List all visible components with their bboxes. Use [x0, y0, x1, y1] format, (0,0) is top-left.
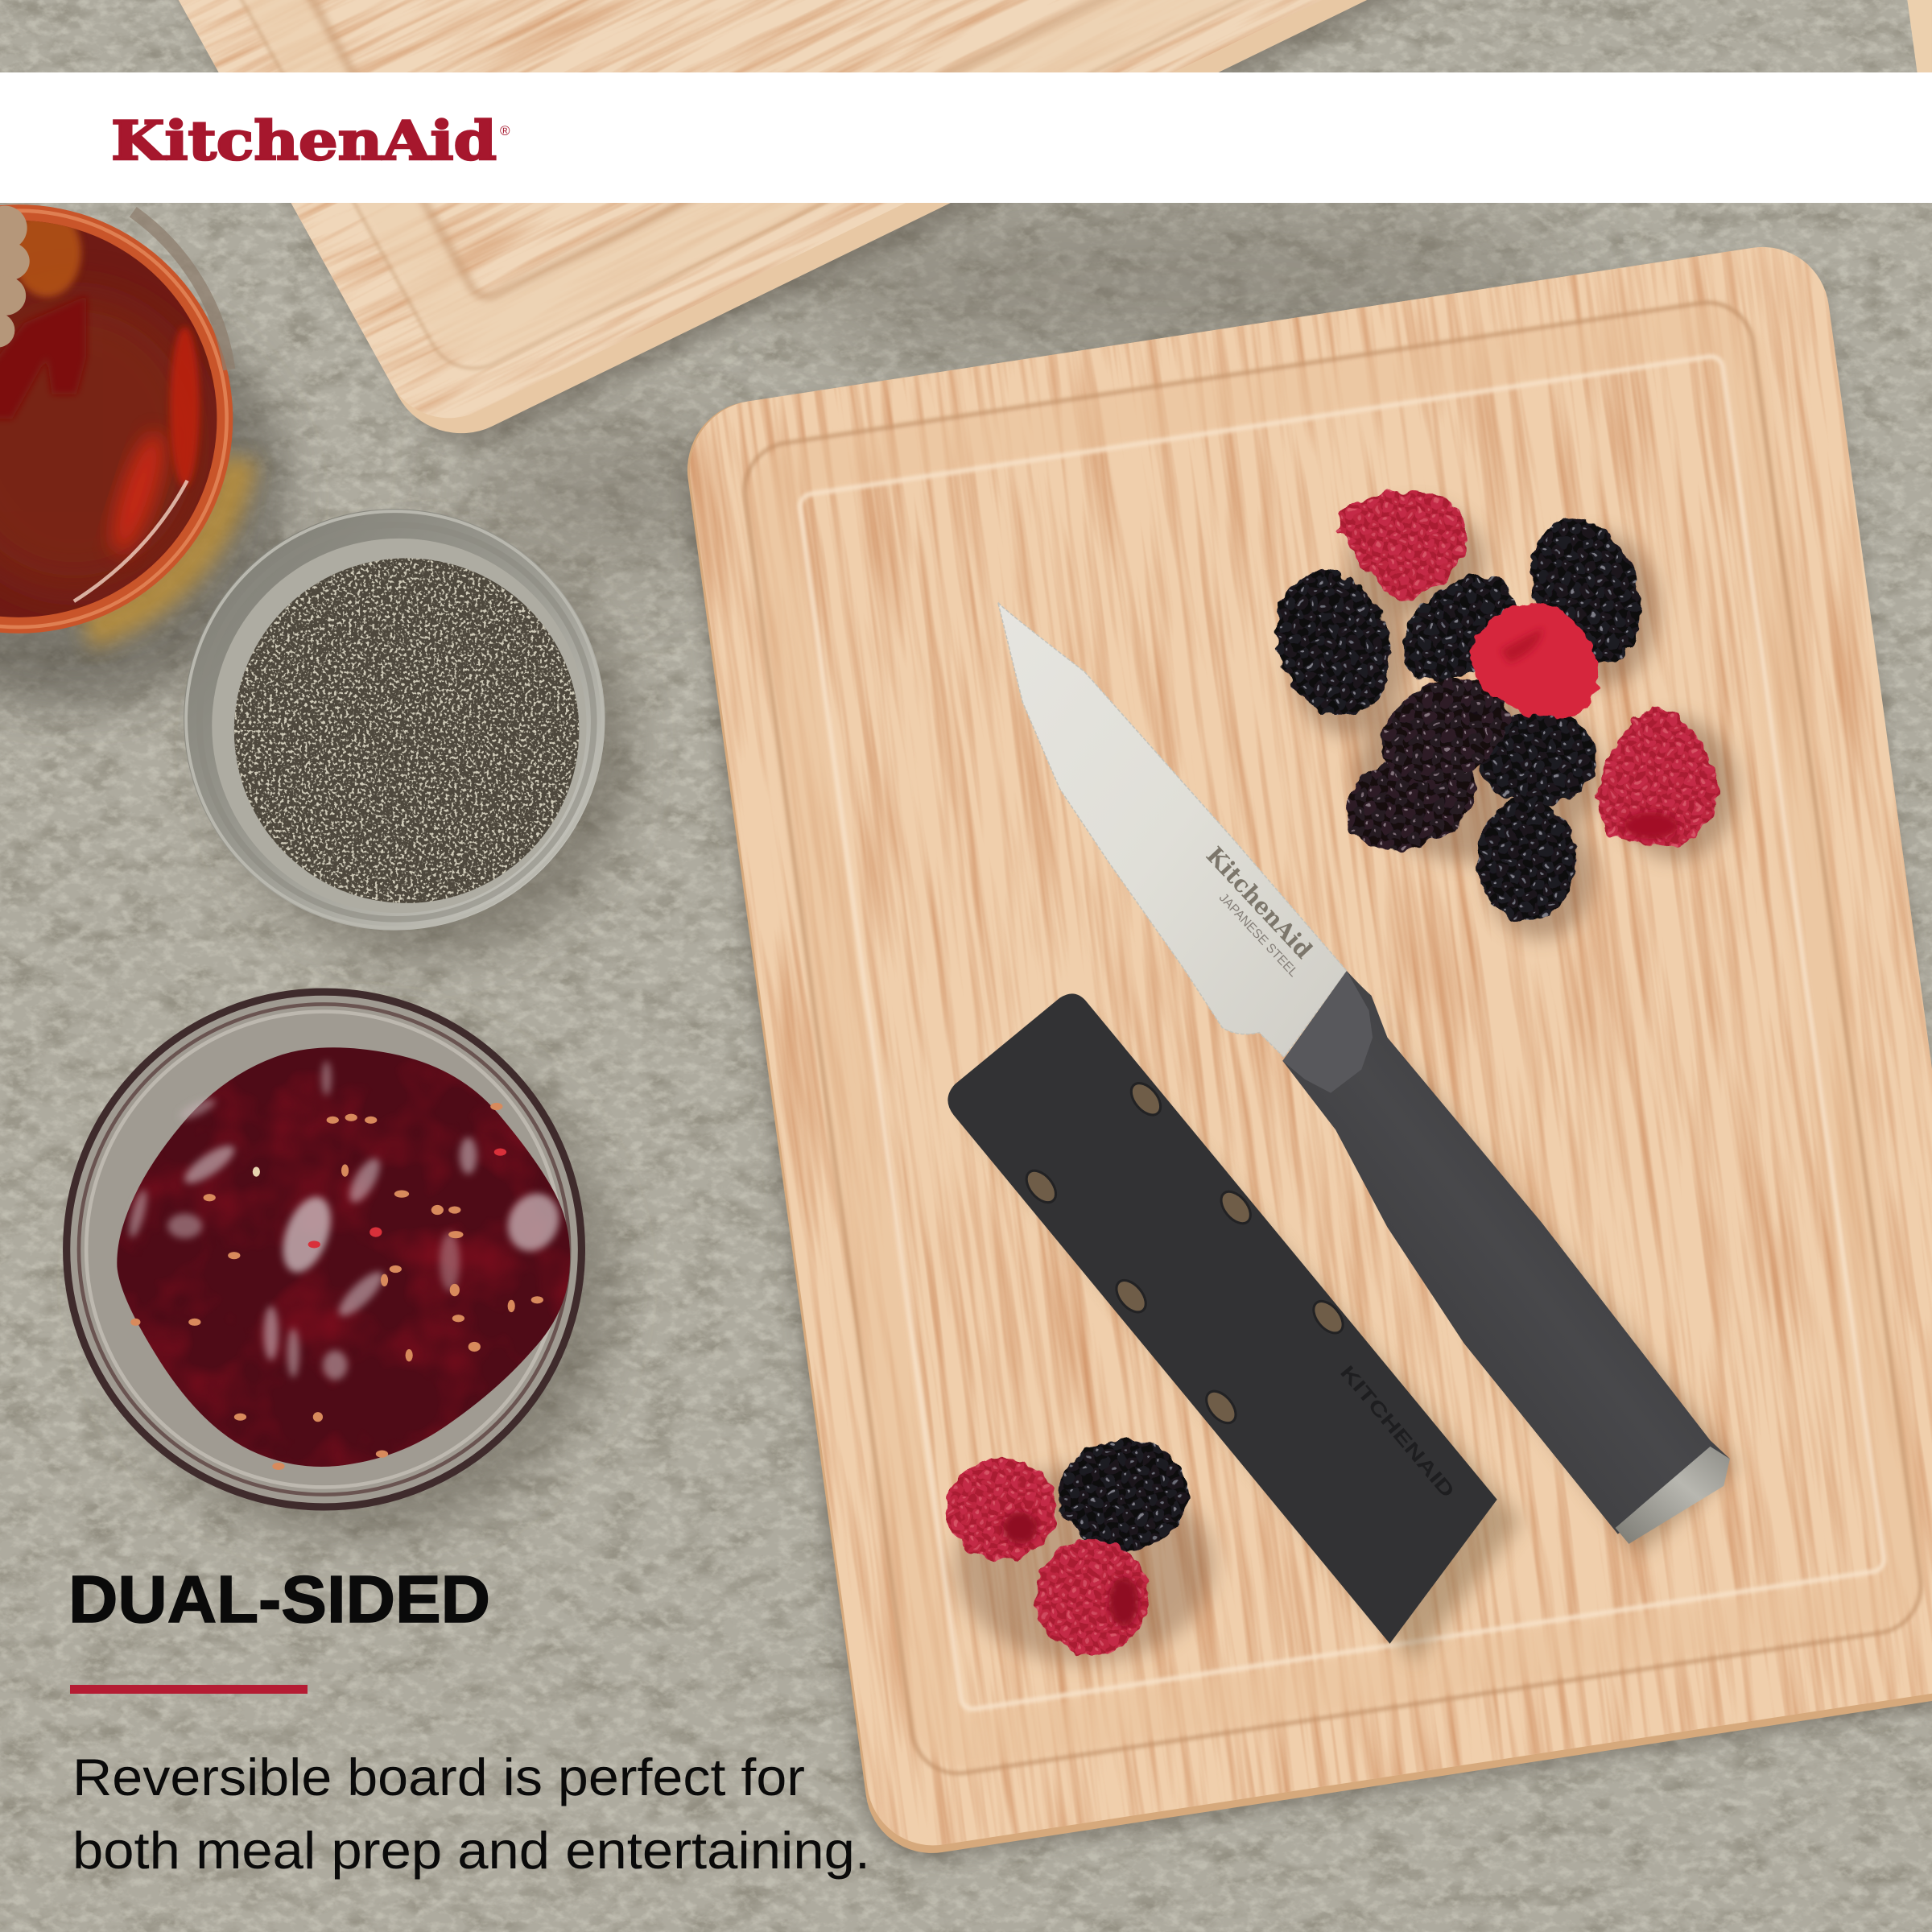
berry shadows	[1290, 504, 1737, 939]
blade logo: KitchenAid	[1201, 841, 1318, 964]
blackberry	[1257, 555, 1409, 731]
blackberry	[1059, 1439, 1187, 1550]
berries top cluster	[1257, 491, 1737, 939]
jam bowl	[63, 989, 616, 1540]
far right board corner	[1907, 0, 1932, 72]
upper cutting board	[0, 0, 1662, 469]
knife handle	[1282, 971, 1730, 1534]
shadows on stone	[469, 197, 1577, 567]
description: both meal prep and entertaining.	[72, 1821, 870, 1880]
chia seed bowl	[184, 509, 634, 959]
blackberry	[1513, 504, 1658, 679]
heading: DUAL-SIDED	[68, 1562, 490, 1637]
blackberry	[1363, 657, 1525, 804]
blade sheath	[947, 993, 1521, 1663]
juice groove	[739, 296, 1926, 1780]
jam seeds	[130, 1103, 543, 1470]
blackberry	[1382, 555, 1534, 703]
main cutting board	[676, 237, 1932, 1868]
description: Reversible board is perfect for	[72, 1748, 805, 1806]
jam	[117, 1047, 570, 1470]
logo: ®	[500, 123, 510, 138]
sheath logo: KITCHENAID	[1335, 1362, 1459, 1502]
blade subtitle: JAPANESE STEEL	[1216, 890, 1301, 980]
knife	[998, 602, 1737, 1555]
raspberry right	[1598, 705, 1717, 845]
sheath vents	[1021, 1078, 1348, 1428]
honey bowl	[0, 204, 290, 708]
honey red reflection	[101, 427, 174, 559]
berries group	[1257, 491, 1717, 922]
raspberry hollow	[1624, 812, 1678, 839]
header banner	[0, 72, 1932, 203]
honey dipper	[0, 206, 30, 348]
honey dark reflection	[0, 295, 86, 419]
handle collar	[1282, 971, 1373, 1093]
raspberry	[947, 1459, 1057, 1560]
honey caustic glow	[86, 458, 239, 631]
berries bottom cluster	[947, 1439, 1214, 1663]
honey	[0, 221, 217, 617]
red divider	[70, 1685, 308, 1694]
blackberry	[1332, 735, 1489, 866]
raspberry dimple	[1501, 629, 1542, 663]
blackberry	[1480, 710, 1596, 806]
handle end cap	[1616, 1447, 1730, 1544]
knife blade	[998, 602, 1347, 1057]
blackberry	[1477, 799, 1576, 922]
logo: KitchenAid	[111, 109, 497, 172]
upper board groove	[3, 0, 1617, 383]
raspberry hollows	[1003, 1512, 1038, 1544]
honey amber reflection	[16, 221, 85, 300]
raspberry	[1340, 491, 1468, 601]
jam highlights	[126, 1061, 568, 1380]
knife shadow	[1380, 985, 1737, 1555]
chia seeds	[234, 558, 579, 903]
raspberry center	[1470, 602, 1599, 720]
raspberry	[1035, 1539, 1149, 1655]
